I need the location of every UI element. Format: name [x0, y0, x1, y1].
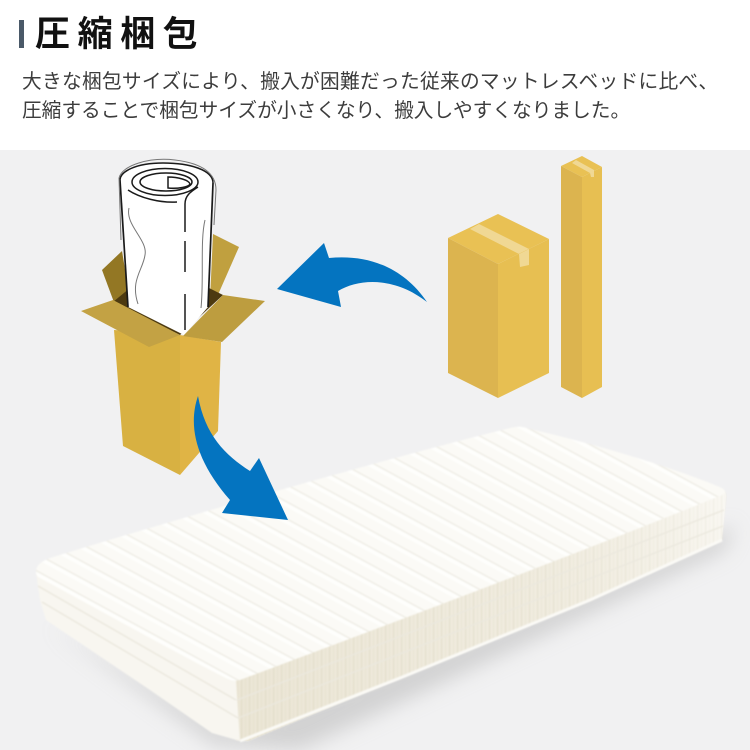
- title: 圧縮梱包: [35, 15, 205, 54]
- rolled mattress: [119, 159, 216, 335]
- arrow: from boxes to roll: [277, 243, 427, 307]
- mattress bottom piping: [240, 540, 722, 741]
- mattress shadow: [50, 525, 735, 750]
- roll outlines: [120, 163, 213, 330]
- mattress short side: [36, 572, 240, 741]
- large shipping box: [448, 214, 549, 398]
- mattress long side: [230, 490, 726, 741]
- front right flap: [183, 295, 265, 342]
- tape: [470, 224, 529, 267]
- right face: [582, 167, 602, 398]
- arrow: from box to mattress: [194, 396, 288, 520]
- top face: [561, 156, 602, 177]
- open box with rolled mattress: [81, 159, 265, 475]
- description text: [22, 70, 718, 122]
- box interior: [113, 288, 223, 335]
- front left flap: [81, 300, 180, 347]
- tape front fold: [519, 249, 529, 267]
- description text: 圧縮することで梱包サイズが小さくなり、搬入しやすくなりました。: [22, 100, 630, 122]
- left face: [561, 166, 582, 398]
- mattress: [36, 427, 735, 750]
- description text: 大きな梱包サイズにより、搬入が困難だった従来のマットレスベッドに比べ、: [22, 71, 718, 93]
- left face: [448, 238, 498, 398]
- back flaps: [102, 251, 130, 305]
- slim shipping box: [561, 156, 602, 398]
- roll body: [120, 163, 213, 335]
- tape: [572, 160, 594, 177]
- illustration panel: [0, 150, 750, 750]
- box left face: [114, 330, 180, 475]
- right face: [498, 239, 549, 398]
- mattress top face: [36, 427, 725, 681]
- wrap lines: [119, 159, 216, 308]
- box right face: [180, 335, 221, 475]
- side seam lines: [38, 510, 724, 718]
- top face: [448, 214, 549, 264]
- heading accent bar: [19, 20, 24, 48]
- long side shading: [230, 490, 726, 741]
